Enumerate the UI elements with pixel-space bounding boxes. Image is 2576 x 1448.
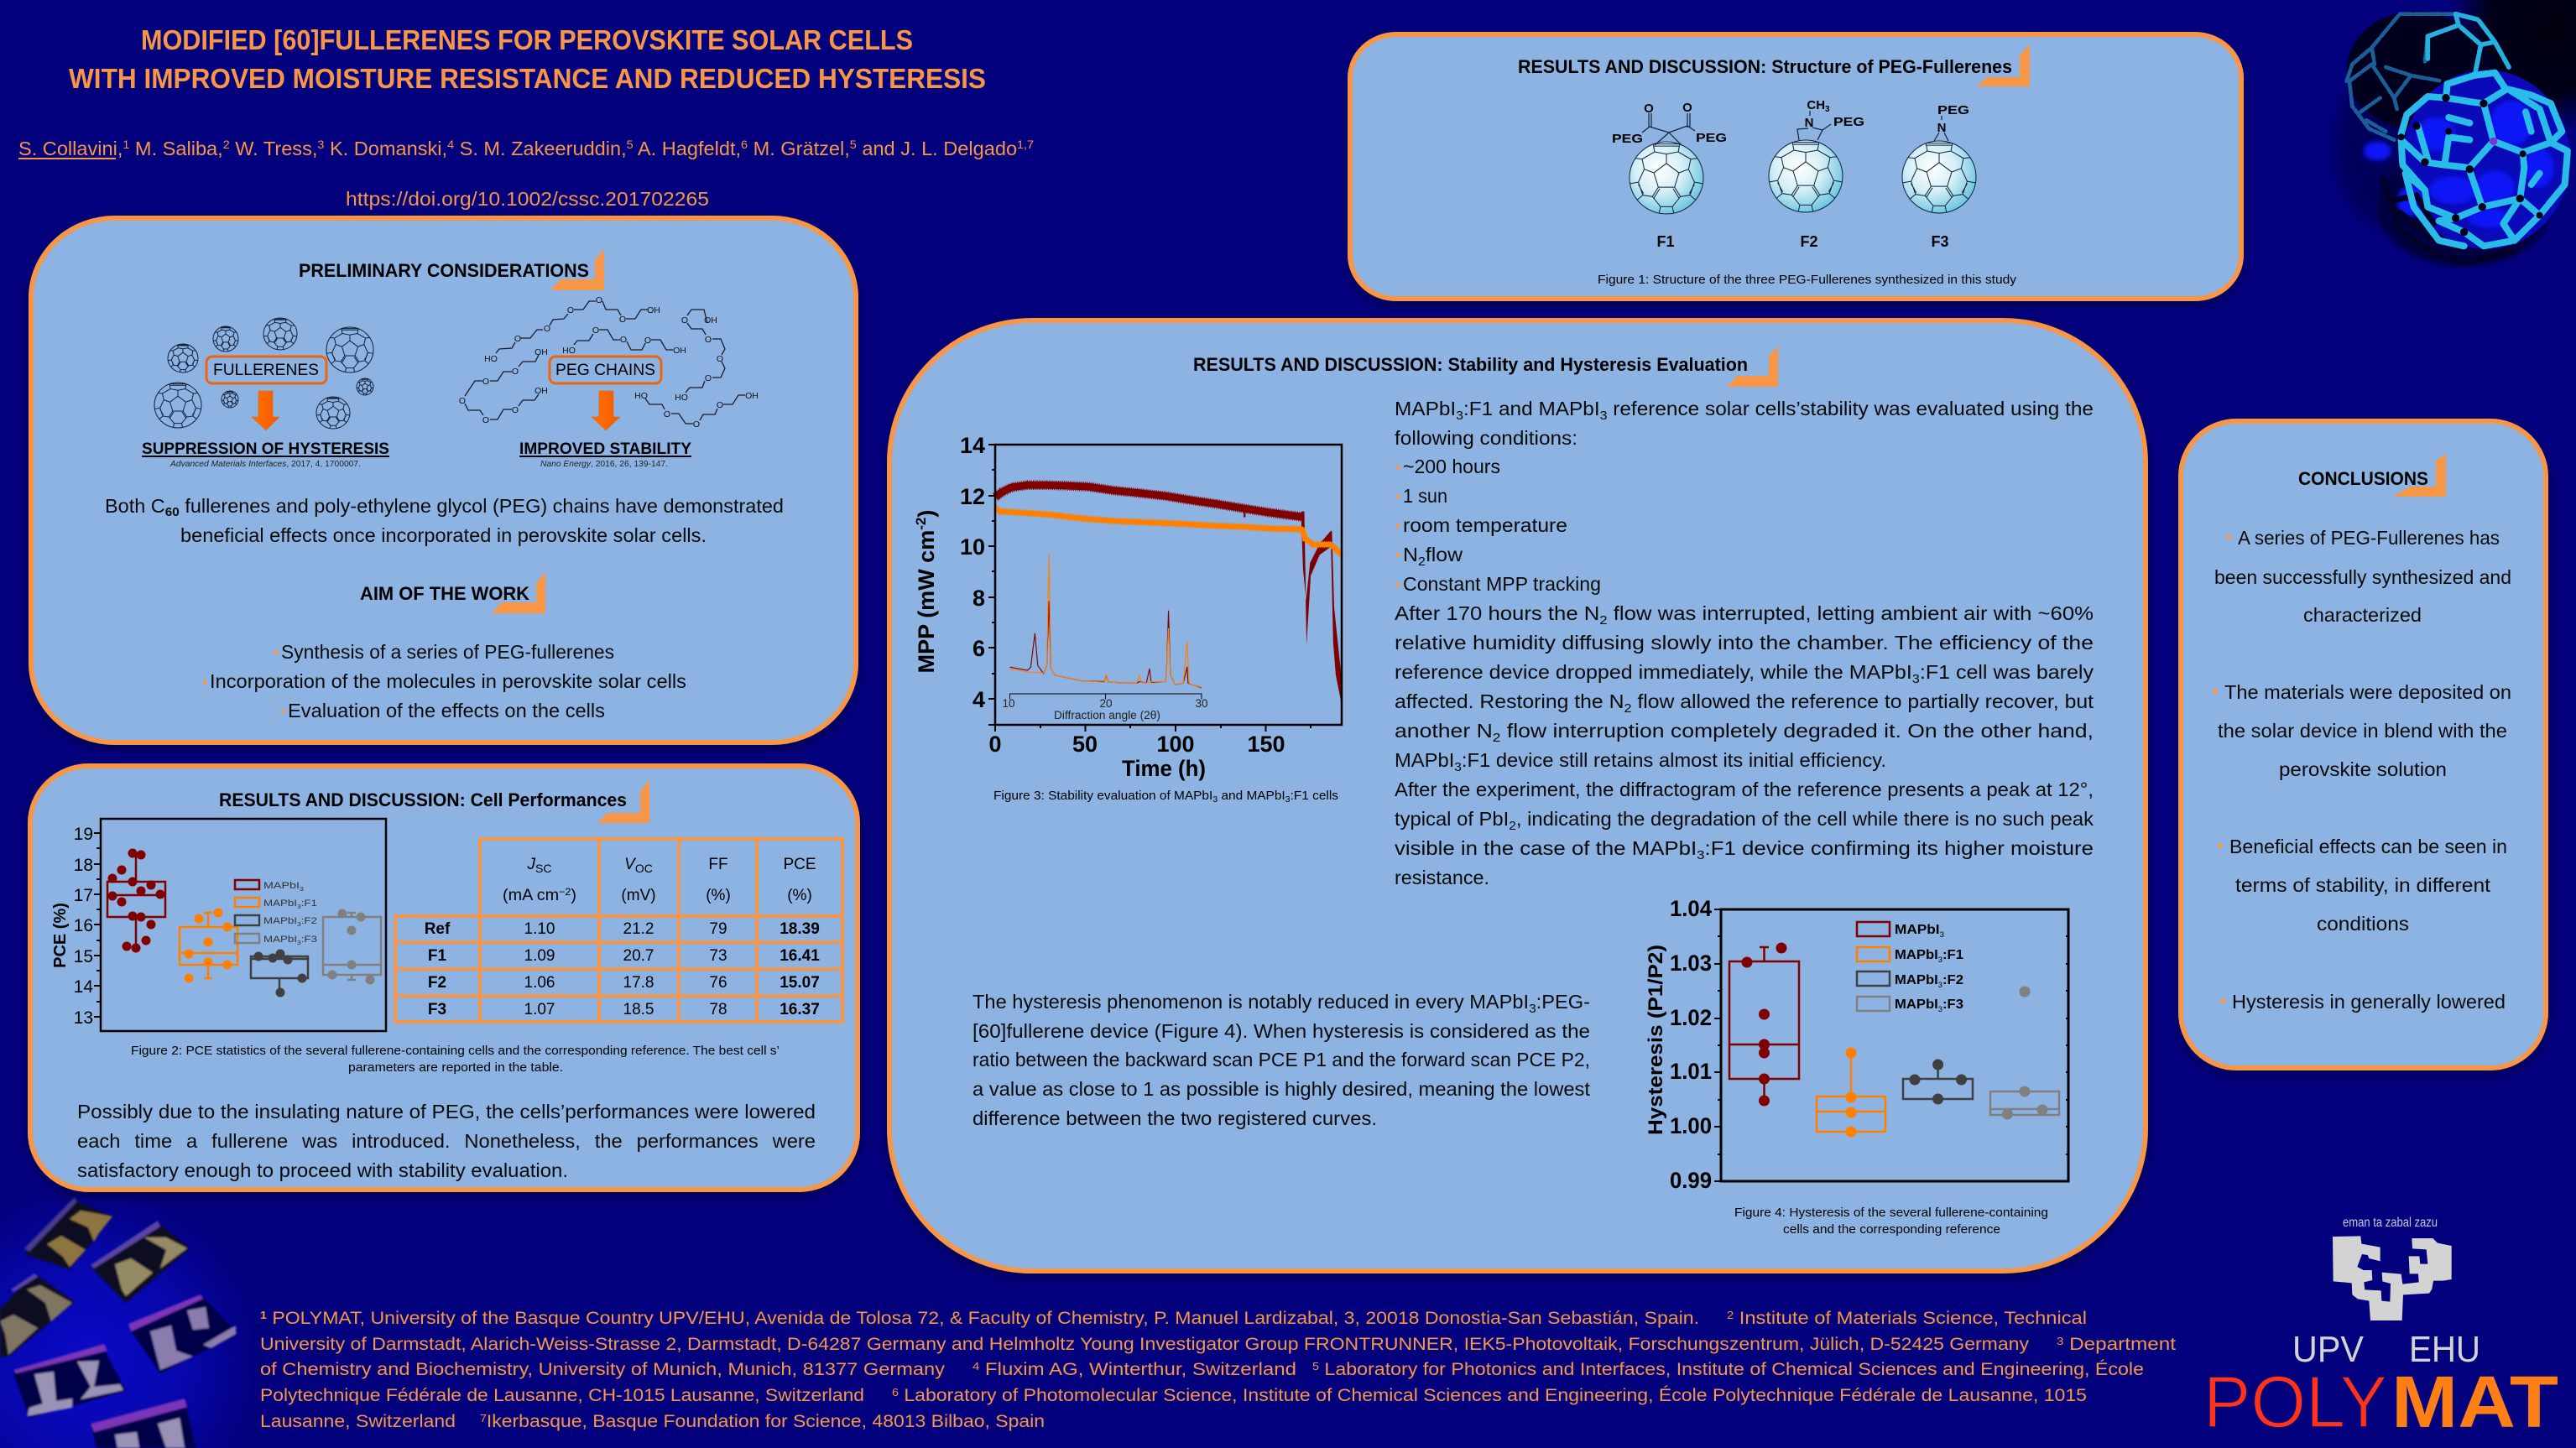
table: best cell parameters: V — [624, 856, 637, 873]
text: stability discussion: visible in the case of the MAPbI — [1395, 837, 1664, 859]
text: affiliations: of Chemistry and Biochemistry, University of Munich, Munich, 81377 Germany — [260, 1360, 946, 1379]
diagram: PEG chains: O — [459, 396, 466, 406]
text: stability discussion: 3 — [1697, 848, 1705, 862]
caption: figure 3: 3 — [1212, 795, 1218, 805]
text: cell performances discussion — [77, 1101, 816, 1181]
text: hysteresis discussion: a value as close to 1 as possible is highly desired, meaning the lowest — [973, 1078, 1591, 1100]
text: conclusion four: Hysteresis in generally lowered — [2232, 991, 2506, 1013]
diagram: PEG chains: HO — [675, 393, 688, 403]
chart: hysteresis box plot: 0.99 — [1670, 1168, 1712, 1193]
table: best cell parameters: 16.41 — [780, 947, 820, 965]
text: stability discussion: MAPbI — [1395, 749, 1452, 771]
chart: hysteresis box plot: 1.02 — [1670, 1005, 1712, 1030]
diagram: PEG chains: IMPROVED STABILITY — [519, 440, 691, 458]
chart: hysteresis box plot: 1.01 — [1670, 1059, 1712, 1084]
diagram: PEG chains: OH — [704, 315, 717, 326]
chart: hysteresis box plot: MAPbI — [1895, 997, 1937, 1012]
chart: MPP stability over time: 30 — [1195, 697, 1208, 710]
text: stability discussion: After 170 hours the N — [1395, 602, 1578, 624]
table: best cell parameters: 15.07 — [780, 974, 820, 992]
table: best cell parameters: ) — [571, 887, 576, 904]
title: MODIFIED [60]FULLERENES FOR PEROVSKITE SOLAR CELLS — [141, 24, 913, 55]
authors: M. Saliba, — [129, 138, 223, 159]
authors: 3 — [317, 138, 325, 151]
caption: figure 2: parameters are reported in the table. — [348, 1061, 563, 1075]
text: stability discussion: ~200 hours — [1403, 456, 1500, 477]
text: conclusion two: The materials were deposited on — [2224, 681, 2511, 703]
chart: MPP stability over time: 4 — [973, 687, 985, 712]
text: stability discussion: flow allowed the reference to partially recover, but — [1631, 690, 2094, 712]
chart: PCE box plot: :F1 — [301, 898, 317, 909]
heading: structure — [1518, 44, 2030, 86]
text: introduction: Both C — [105, 495, 164, 517]
table: best cell parameters: FF — [708, 856, 728, 873]
table: best cell parameters: 1.09 — [524, 947, 555, 965]
text: conclusion three — [2218, 836, 2507, 935]
logo: POLYMAT: MAT — [2391, 1362, 2558, 1443]
diagram: PEG chains: O — [717, 400, 723, 410]
caption: figure 1: Figure 1: Structure of the three PEG-Fullerenes synthesized in this study — [1598, 273, 2017, 287]
diagram: PEG chains: O — [644, 336, 651, 346]
table: best cell parameters: 20.7 — [623, 947, 654, 965]
text: stability discussion: reference solar cells’stability was evaluated using the — [1607, 398, 2094, 419]
chart: MPP stability over time: 10 — [960, 534, 985, 560]
text: affiliations: University of Darmstadt, Alarich-Weiss-Strasse 2, Darmstadt, D-64287 Germany and Helmholtz Young Investigator Group FRONTRUNNER, IEK5-Photovoltaik, Forschungszentrum, Jülich, D-52425 Germany — [260, 1335, 2030, 1354]
diagram: PEG chains: O — [482, 377, 489, 387]
text: stability discussion: 2 — [1599, 613, 1608, 628]
structure: F3: N — [1937, 121, 1946, 135]
diagram: PEG chains: O — [717, 354, 723, 364]
table: best cell parameters: F1 — [428, 947, 447, 965]
chart: MPP stability over time: 10 — [1002, 697, 1015, 710]
heading: aim of the work: AIM OF THE WORK — [360, 583, 529, 604]
list: aims: Evaluation of the effects on the cells — [288, 700, 605, 721]
table: best cell parameters: F3 — [428, 1001, 446, 1018]
table: best cell parameters: 16.37 — [780, 1001, 820, 1018]
heading: conclusions: CONCLUSIONS — [2298, 468, 2428, 489]
table: best cell parameters: 1.06 — [524, 974, 555, 992]
text: conclusion one: characterized — [2303, 604, 2422, 626]
diagram: PEG chains: OH — [534, 347, 548, 357]
text: stability discussion: 2 — [1509, 819, 1516, 833]
heading: aim of the work — [360, 572, 545, 613]
text: hysteresis discussion: difference between the two registered curves. — [973, 1107, 1377, 1129]
chart: PCE box plot: 14 — [74, 977, 93, 997]
diagram: fullerenes: Advanced Materials Interfaces, 2017, 4, 1700007. — [169, 459, 361, 469]
authors: M. Grätzel, — [748, 138, 850, 159]
text: hysteresis discussion — [973, 991, 1591, 1129]
chart: MPP stability over time — [913, 433, 1342, 781]
structure: F1: F1 — [1656, 233, 1675, 250]
text: stability discussion: , indicating the degradation of the cell while there is no such peak — [1516, 808, 2094, 830]
structure: F3 — [1902, 103, 1976, 250]
text: stability discussion: room temperature — [1403, 514, 1567, 536]
text: stability discussion: reference device dropped immediately, while the MAPbI — [1395, 661, 1870, 683]
chart: PCE box plot: MAPbI — [263, 898, 291, 909]
authors: 5 — [627, 138, 634, 151]
diagram: PEG chains: OH — [534, 386, 548, 396]
chart: hysteresis box plot: MAPbI — [1895, 973, 1937, 987]
chart: hysteresis box plot: :F1 — [1942, 948, 1963, 962]
table: best cell parameters: 76 — [709, 974, 727, 992]
list: aims — [203, 641, 686, 721]
chart: MPP stability over time: 0 — [988, 732, 1002, 757]
heading: preliminary considerations: PRELIMINARY CONSIDERATIONS — [299, 260, 589, 281]
diagram: PEG chains: O — [544, 324, 550, 334]
chart: hysteresis box plot: MAPbI — [1895, 923, 1937, 937]
text: affiliations: Institute of Materials Science, Technical — [1734, 1309, 2087, 1328]
table: best cell parameters: (%) — [706, 887, 731, 904]
structure: F1: O — [1682, 101, 1692, 115]
table: best cell parameters: J — [527, 856, 536, 873]
chart: PCE box plot: 3 — [297, 904, 301, 910]
panel: cell performances — [30, 766, 858, 1190]
diagram: PEG chains: O — [482, 415, 489, 425]
diagram: PEG chains: O — [512, 405, 519, 415]
chart: MPP stability over time: 50 — [1072, 732, 1098, 757]
structure: F2: PEG — [1833, 115, 1864, 129]
text: affiliations: Ikerbasque, Basque Foundation for Science, 48013 Bilbao, Spain — [487, 1412, 1045, 1431]
table: best cell parameters: (mV) — [621, 887, 656, 904]
table: best cell parameters: −2 — [559, 886, 571, 898]
text: affiliations: 2 — [1727, 1309, 1734, 1321]
text: conclusion one — [2214, 527, 2511, 626]
table: best cell parameters: 21.2 — [623, 920, 654, 938]
diagram: PEG chains: O — [596, 295, 602, 305]
text: stability discussion: 2 — [1418, 555, 1426, 569]
chart: MPP stability over time: 8 — [973, 586, 985, 611]
panel: conclusions — [2181, 421, 2546, 1068]
chart: MPP stability over time: Diffraction angle (2θ) — [1054, 709, 1160, 721]
diagram: PEG chains: O — [512, 367, 519, 377]
text: hysteresis discussion: :PEG- — [1536, 991, 1590, 1013]
text: affiliations: Polytechnique Fédérale de Lausanne, CH-1015 Lausanne, Switzerland — [260, 1386, 864, 1405]
caption: figure 3: Figure 3: Stability evaluation of MAPbI — [993, 789, 1200, 803]
table: best cell parameters: Ref — [425, 920, 451, 938]
chart: PCE box plot: 16 — [74, 916, 93, 935]
structure: F1: PEG — [1696, 131, 1727, 145]
text: stability discussion: 2 — [1624, 701, 1631, 716]
text: stability discussion: 3 — [1456, 409, 1463, 423]
diagram: PEG chains: O — [681, 315, 688, 326]
heading: cell performances — [219, 780, 649, 823]
list: aims: Incorporation of the molecules in perovskite solar cells — [210, 670, 686, 692]
diagram: PEG chains: O — [620, 335, 627, 345]
text: stability discussion: flow — [1426, 544, 1463, 565]
chart: PCE box plot: 19 — [74, 825, 93, 844]
table: best cell parameters: OC — [635, 862, 653, 875]
heading: preliminary considerations — [299, 249, 604, 290]
structure: F1 — [1612, 101, 1727, 250]
table: best cell parameters: 17.8 — [623, 974, 654, 992]
text: stability discussion: relative humidity diffusing slowly into the chamber. The efficiency of the — [1395, 632, 2094, 654]
heading: stability — [1193, 346, 1778, 387]
text: introduction: 60 — [165, 505, 180, 519]
text: affiliations: Laboratory of Photomolecular Science, Institute of Chemical Sciences and Engineering, École Polytechnique Fédérale de Lausanne, 1015 — [899, 1386, 2087, 1405]
logo: UPV/EHU: EHU — [2409, 1329, 2480, 1370]
chart: hysteresis box plot: 3 — [1938, 1005, 1942, 1013]
chart: MPP stability over time: 100 — [1156, 732, 1195, 757]
heading: structure: RESULTS AND DISCUSSION: Structure of PEG-Fullerenes — [1518, 56, 2012, 77]
chart: MPP stability over time: 6 — [973, 636, 985, 661]
structure: F1: O — [1644, 102, 1654, 116]
authors: and J. L. Delgado — [857, 138, 1017, 159]
panel: preliminary considerations — [31, 218, 856, 742]
text: cell performances discussion: satisfactory enough to proceed with stability evaluation. — [77, 1159, 568, 1181]
text: stability discussion: After the experiment, the diffractogram of the reference presents a peak at 12°, — [1395, 779, 2094, 800]
logo: UPV/EHU — [2292, 1216, 2480, 1370]
caption: figure 3: and MAPbI — [1218, 789, 1285, 803]
caption: figure 3: :F1 cells — [1291, 789, 1338, 803]
text: hysteresis discussion: [60]fullerene device (Figure 4). When hysteresis is considered as the — [973, 1020, 1590, 1042]
caption: figure 3: 3 — [1285, 795, 1291, 805]
diagram: PEG chains: OH — [647, 305, 660, 315]
structure: F2: N — [1805, 116, 1813, 130]
diagram: PEG chains: PEG CHAINS — [555, 362, 655, 379]
text: stability discussion: typical of PbI — [1395, 808, 1505, 830]
text: stability discussion: 3 — [1454, 760, 1462, 774]
title: WITH IMPROVED MOISTURE RESISTANCE AND REDUCED HYSTERESIS — [69, 63, 986, 94]
logo: POLYMAT — [2203, 1362, 2558, 1443]
text: affiliations — [260, 1309, 2176, 1431]
caption: figure 2 — [131, 1044, 780, 1075]
text: hysteresis discussion: The hysteresis phenomenon is notably reduced in every MAPbI — [973, 991, 1515, 1013]
text: stability discussion: 2 — [1493, 731, 1500, 745]
diagram: fullerenes — [142, 318, 389, 469]
table: best cell parameters: 1.07 — [524, 1001, 555, 1018]
text: cell performances discussion: each time a fullerene was introduced. Nonetheless, the performances were — [77, 1130, 816, 1152]
caption: figure 4: cells and the corresponding reference — [1783, 1223, 2000, 1237]
diagram: PEG chains: O — [705, 335, 712, 345]
text: conclusion two: the solar device in blend with the — [2218, 720, 2507, 742]
chart: hysteresis box plot — [1645, 896, 2068, 1193]
text: stability discussion: Constant MPP tracking — [1403, 573, 1601, 595]
chart: PCE box plot: 3 — [297, 940, 301, 946]
chart: PCE box plot: MAPbI — [263, 881, 291, 891]
chart: PCE box plot: 3 — [297, 922, 301, 928]
text: hysteresis discussion: 3 — [1529, 1002, 1536, 1016]
caption: figure 2: Figure 2: PCE statistics of the several fullerene-containing cells and the corresponding reference. The best cell s’ — [131, 1044, 780, 1058]
text: conclusion two — [2213, 681, 2511, 780]
photo: fullerene model, top right — [2335, 0, 2576, 267]
heading: conclusions — [2298, 454, 2446, 497]
chart: MPP stability over time: -2 — [913, 518, 929, 530]
text: stability discussion: :F1 cell was barely — [1920, 661, 2094, 683]
diagram: PEG chains: O — [619, 315, 626, 325]
diagram: PEG chains: O — [567, 305, 574, 315]
text: affiliations: Laboratory for Photonics and Interfaces, Institute of Chemical Sciences and Engineering, École — [1319, 1360, 2144, 1379]
authors: S. Collavini, — [18, 138, 120, 159]
heading: cell performances: RESULTS AND DISCUSSION: Cell Performances — [219, 789, 627, 810]
diagram: PEG chains: O — [693, 419, 700, 430]
text: affiliations: 1 — [260, 1309, 267, 1321]
table: best cell parameters: 18.39 — [780, 920, 820, 938]
diagram: PEG chains: OH — [673, 346, 686, 356]
text: affiliations: 3 — [2057, 1335, 2063, 1347]
diagram: PEG chains: O — [514, 334, 521, 344]
text: affiliations: POLYMAT, University of the Basque Country UPV/EHU, Avenida de Tolosa 72, & Faculty of Chemistry, P. Manuel Lardizabal, 3, 20018 Donostia-San Sebastián, Spain. — [267, 1309, 1699, 1328]
text: stability discussion: MAPbI — [1395, 398, 1452, 419]
panel: structure of PEG-fullerenes — [1350, 34, 2241, 299]
logo: UPV/EHU: eman ta zabal zazu — [2343, 1216, 2438, 1230]
table: best cell parameters: F2 — [428, 974, 446, 992]
chart: hysteresis box plot: 1.04 — [1670, 896, 1712, 921]
caption: figure 4 — [1734, 1206, 2048, 1237]
text: stability discussion: :F1 device confirming its higher moisture — [1705, 837, 2094, 859]
text: stability discussion — [1395, 398, 2094, 888]
structure: F3: PEG — [1937, 103, 1969, 117]
text: stability discussion: :F1 device still retains almost its initial efficiency. — [1462, 749, 1886, 771]
diagram: PEG chains: O — [592, 326, 599, 336]
text: stability discussion: 3 — [1600, 409, 1607, 423]
chart: PCE box plot — [51, 819, 386, 1031]
chart: hysteresis box plot: 3 — [1938, 981, 1942, 989]
text: stability discussion: N — [1403, 544, 1417, 565]
text: stability discussion: another N — [1395, 720, 1479, 742]
authors: 4 — [447, 138, 454, 151]
structure: F2: F2 — [1800, 233, 1818, 250]
text: affiliations: 5 — [1312, 1360, 1319, 1372]
diagram: fullerenes: FULLERENES — [213, 362, 319, 379]
chart: hysteresis box plot: :F3 — [1942, 997, 1963, 1012]
authors: 1 — [123, 138, 130, 151]
caption: figure 4: Figure 4: Hysteresis of the several fullerene-containing — [1734, 1206, 2048, 1220]
chart: hysteresis box plot: :F2 — [1942, 973, 1963, 987]
table: best cell parameters: 79 — [709, 920, 727, 938]
chart: PCE box plot: 13 — [74, 1008, 93, 1028]
chart: PCE box plot: 17 — [74, 886, 93, 905]
logo: UPV/EHU: UPV — [2292, 1329, 2365, 1370]
heading: stability: RESULTS AND DISCUSSION: Stability and Hysteresis Evaluation — [1193, 354, 1748, 375]
logo: POLYMAT: POLY — [2203, 1362, 2387, 1443]
text: affiliations: Lausanne, Switzerland — [260, 1412, 456, 1431]
table: best cell parameters: 78 — [709, 1001, 727, 1018]
chart: MPP stability over time: 150 — [1247, 732, 1285, 757]
text: stability discussion: 3 — [1912, 672, 1920, 686]
structure: F2 — [1769, 98, 1864, 250]
table: best cell parameters: (mA cm — [503, 887, 556, 904]
table: best cell parameters: 1.10 — [524, 920, 555, 938]
diagram: PEG chains: HO — [484, 354, 498, 364]
chart: PCE box plot: :F3 — [301, 935, 317, 945]
chart: PCE box plot: PCE (%) — [51, 903, 70, 968]
chart: PCE box plot: 18 — [74, 856, 93, 875]
table: best cell parameters: 18.5 — [623, 1001, 654, 1018]
chart: hysteresis box plot: Hysteresis (P1/P2) — [1645, 945, 1667, 1135]
authors: 2 — [223, 138, 230, 151]
authors: K. Domanski, — [324, 138, 447, 159]
text: cell performances discussion: Possibly due to the insulating nature of PEG, the cells’performances were lowered — [77, 1101, 816, 1122]
text: introduction — [105, 495, 784, 546]
authors: 6 — [741, 138, 748, 151]
diagram: PEG chains: HO — [562, 346, 576, 356]
text: affiliations: 7 — [480, 1412, 487, 1425]
chart: MPP stability over time: 12 — [960, 484, 985, 509]
diagram: PEG chains: O — [664, 409, 670, 419]
chart: PCE box plot: MAPbI — [263, 935, 291, 945]
diagram: fullerenes: SUPPRESSION OF HYSTERESIS — [142, 440, 389, 458]
authors: W. Tress, — [230, 138, 317, 159]
chart: PCE box plot: MAPbI — [263, 916, 291, 926]
chart: MPP stability over time: 14 — [960, 433, 985, 458]
text: stability discussion: following conditions: — [1395, 427, 1577, 449]
chart: PCE box plot: 3 — [300, 887, 304, 893]
diagram: PEG chains — [459, 295, 759, 469]
structure: F2: 3 — [1825, 105, 1830, 114]
chart: hysteresis box plot: 1.00 — [1670, 1113, 1712, 1138]
text: conclusion two: perovskite solution — [2279, 758, 2447, 780]
authors: A. Hagfeldt, — [634, 138, 741, 159]
authors — [18, 138, 1034, 159]
authors: 1,7 — [1017, 138, 1034, 151]
text: introduction: beneficial effects once incorporated in perovskite solar cells. — [180, 524, 707, 546]
authors: S. M. Zakeeruddin, — [454, 138, 627, 159]
title — [69, 24, 986, 94]
text: conclusion one: A series of PEG-Fullerenes has — [2238, 527, 2500, 549]
text: affiliations: 4 — [973, 1360, 979, 1372]
text: conclusion one: been successfully synthesized and — [2214, 566, 2511, 588]
photo: solar cell devices, bottom left — [0, 1197, 269, 1448]
doi link: https://doi.org/10.1002/cssc.201702265 — [346, 188, 709, 210]
authors: 5 — [850, 138, 857, 151]
text: stability discussion: :F1 and MAPbI — [1463, 398, 1600, 419]
chart: MPP stability over time: 20 — [1099, 697, 1113, 710]
diagram: PEG chains: OH — [745, 391, 759, 401]
table: best cell parameters: PCE — [783, 856, 816, 873]
chart: MPP stability over time: ) — [914, 510, 939, 518]
chart: hysteresis box plot: 1.03 — [1670, 951, 1712, 976]
chart: hysteresis box plot: 3 — [1938, 956, 1942, 964]
diagram: PEG chains: O — [705, 373, 712, 383]
text: conclusion three: conditions — [2317, 913, 2409, 935]
text: stability discussion: flow was interrupted, letting ambient air with ~60% — [1608, 602, 2094, 624]
text: conclusion three: terms of stability, in different — [2235, 874, 2491, 896]
text: affiliations: Fluxim AG, Winterthur, Switzerland — [979, 1360, 1296, 1379]
structure: F2: CH — [1807, 98, 1825, 112]
text: conclusion three: Beneficial effects can be seen in — [2229, 836, 2507, 857]
structure: F3: F3 — [1931, 233, 1949, 250]
text: stability discussion: resistance. — [1395, 867, 1489, 888]
text: affiliations: 6 — [892, 1386, 899, 1399]
chart: hysteresis box plot: 3 — [1940, 930, 1944, 939]
panel: stability and hysteresis evaluation — [889, 320, 2146, 1271]
list: aims: Synthesis of a series of PEG-fullerenes — [281, 641, 614, 663]
text: stability discussion: affected. Restoring the N — [1395, 690, 1608, 712]
chart: PCE box plot: 15 — [74, 947, 93, 966]
text: affiliations: Department — [2063, 1335, 2176, 1354]
table: best cell parameters: (%) — [787, 887, 812, 904]
diagram: PEG chains: HO — [634, 391, 648, 401]
text: hysteresis discussion: ratio between the backward scan PCE P1 and the forward scan PCE P2, — [973, 1049, 1590, 1070]
text: stability discussion: 1 sun — [1403, 485, 1447, 507]
table: best cell parameters — [395, 839, 842, 1022]
chart: hysteresis box plot: MAPbI — [1895, 948, 1937, 962]
structure: F1: PEG — [1612, 132, 1643, 146]
chart: PCE box plot: :F2 — [301, 916, 317, 926]
diagram: PEG chains: Nano Energy, 2016, 26, 139-147. — [540, 459, 668, 469]
text: stability discussion: flow interruption completely degraded it. On the other hand, — [1500, 720, 2094, 742]
table: best cell parameters: 73 — [709, 947, 727, 965]
table: best cell parameters: SC — [535, 862, 551, 875]
chart: MPP stability over time: MPP (mW cm — [914, 530, 939, 673]
text: introduction: fullerenes and poly-ethylene glycol (PEG) chains have demonstrated — [180, 495, 784, 517]
chart: MPP stability over time: Time (h) — [1122, 756, 1206, 781]
